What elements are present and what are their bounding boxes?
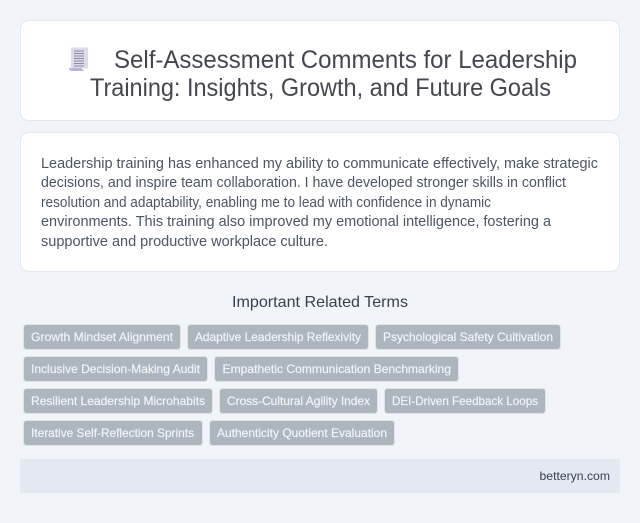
- tag: Empathetic Communication Benchmarking: [222, 362, 451, 376]
- heading: important related terms: Important Related Terms: [232, 294, 408, 311]
- panel: title card: [20, 20, 620, 120]
- footer: [20, 459, 620, 493]
- tag: [24, 356, 208, 382]
- tag: [210, 420, 394, 446]
- tag: [384, 388, 546, 414]
- tag: Psychological Safety Cultivation: [383, 330, 553, 344]
- tag: Adaptive Leadership Reflexivity: [195, 330, 361, 344]
- panel: summary text: Leadership training has enhanced my ability to communicate effectively, make strategic: [41, 156, 598, 172]
- tag: [24, 420, 202, 446]
- panel: summary text: environments. This training also improved my emotional intelligence, fostering a: [41, 214, 551, 230]
- panel: summary text: resolution and adaptability, enabling me to lead with confidence in dynamic: [41, 195, 491, 211]
- tag: [220, 388, 378, 414]
- panel: summary text: supportive and productive workplace culture.: [41, 234, 328, 250]
- title: Self-Assessment Comments for Leadership: [114, 46, 577, 74]
- tag: Resilient Leadership Microhabits: [31, 394, 205, 408]
- tag: [376, 324, 560, 350]
- tag: Inclusive Decision-Making Audit: [31, 362, 201, 376]
- title: [90, 46, 577, 102]
- footer: betteryn.com: [540, 469, 610, 483]
- panel: summary text: [20, 132, 620, 272]
- tag: Cross-Cultural Agility Index: [227, 394, 370, 408]
- title: Training: Insights, Growth, and Future Goals: [90, 74, 551, 102]
- tag: DEI-Driven Feedback Loops: [392, 394, 538, 408]
- tag: [188, 324, 368, 350]
- tag: Iterative Self-Reflection Sprints: [31, 426, 194, 440]
- tag: [24, 388, 212, 414]
- tag: Authenticity Quotient Evaluation: [217, 426, 387, 440]
- tag: Growth Mindset Alignment: [31, 330, 174, 344]
- tag: [214, 356, 458, 382]
- panel: summary text: decisions, and inspire team collaboration. I have developed stronger skills in conflict: [41, 175, 566, 191]
- tag list: [24, 324, 560, 446]
- icon: document scroll: [69, 48, 88, 71]
- tag: [24, 324, 180, 350]
